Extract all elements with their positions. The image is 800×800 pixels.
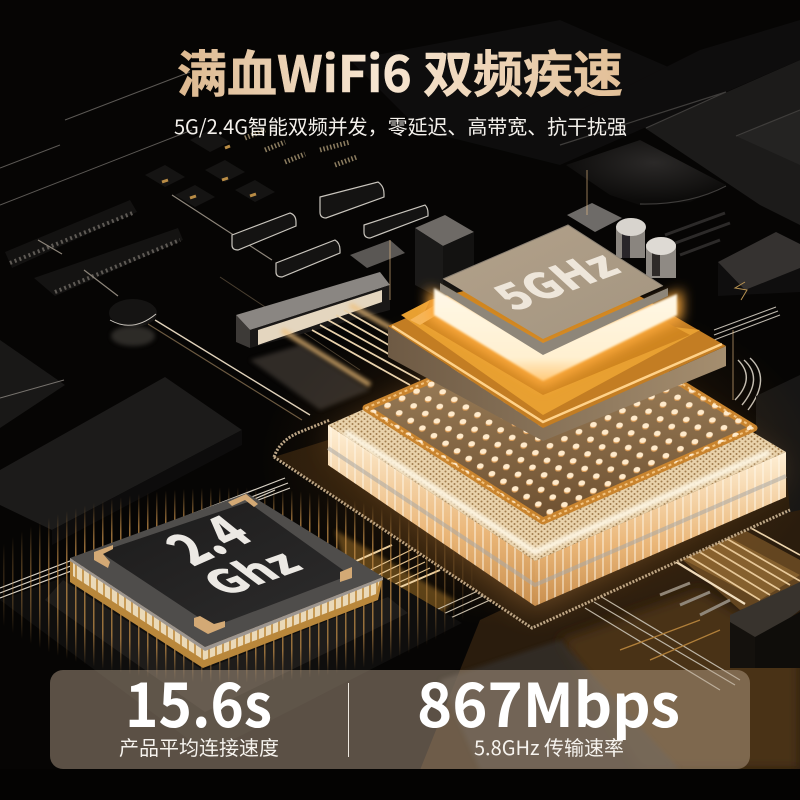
chip label: Ghz: Ghz xyxy=(183,537,316,605)
outer chip trace ring xyxy=(274,420,790,628)
right traces and blocks xyxy=(714,282,800,540)
crystal oscillators xyxy=(232,182,428,277)
chip top xyxy=(70,493,383,647)
tan board with solder balls xyxy=(362,368,758,524)
lower board xyxy=(328,320,786,606)
center glow xyxy=(260,290,800,630)
stats panel xyxy=(50,658,750,769)
corner pads xyxy=(94,494,352,634)
silver pads xyxy=(350,203,800,300)
subtitle: 5G/2.4G智能双频并发，零延迟、高带宽、抗干扰强 xyxy=(174,111,627,140)
divider xyxy=(348,683,349,757)
lower right gold circuit xyxy=(420,510,800,770)
stat: connect speed: 产品平均连接速度 xyxy=(119,732,279,761)
bottom fade xyxy=(0,769,800,800)
long traces xyxy=(148,277,360,420)
5GHz chip xyxy=(440,225,668,355)
stat: transfer rate: 5.8GHz 传输速率 xyxy=(474,732,624,761)
white traces to 2.4 chip xyxy=(0,478,290,598)
coin cell xyxy=(109,299,157,346)
pin headers xyxy=(0,72,272,296)
connector: silver socket with light beams xyxy=(236,272,444,410)
chip label: 5GHz: 5GHz xyxy=(475,236,633,321)
lower left gold circuit xyxy=(335,530,490,635)
teeth xyxy=(70,558,383,668)
title: 满血WiFi6 双频疾速 xyxy=(177,35,623,107)
lower board halo xyxy=(328,380,786,610)
stat: transfer rate: 867Mbps xyxy=(417,658,680,745)
capacitors xyxy=(616,218,676,278)
stat: connect speed: 15.6s xyxy=(125,658,272,745)
panels: dark left chips xyxy=(0,340,242,545)
small black components xyxy=(145,130,357,207)
chip stack: 2.4GHz xyxy=(1,489,472,712)
gold vertical lines xyxy=(3,489,472,680)
dark base xyxy=(0,575,462,753)
panels: dark top right plates xyxy=(350,20,800,225)
chip stack: 5GHz xyxy=(328,170,786,610)
orange tray xyxy=(388,250,726,441)
chip label: 2.4: 2.4 xyxy=(144,500,269,577)
glow layer xyxy=(428,288,682,388)
light rays xyxy=(390,170,733,400)
